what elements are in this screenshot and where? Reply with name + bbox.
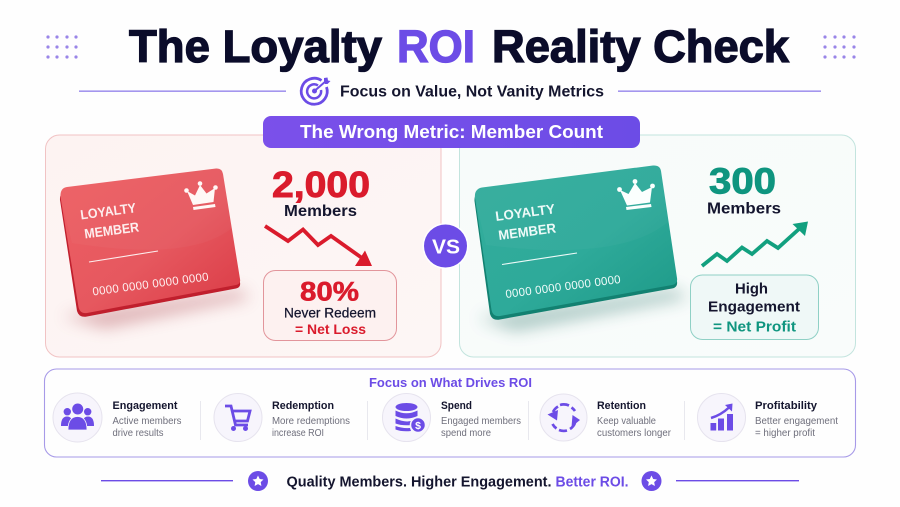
title: The Loyalty <box>129 21 382 72</box>
item: engagement: Active members <box>112 416 182 427</box>
icon: growth chart <box>710 404 733 430</box>
callout: high engagement: High <box>735 280 768 298</box>
callout: high engagement: Engagement <box>708 298 800 316</box>
title <box>129 21 790 72</box>
callout: 80% never redeem <box>264 270 396 340</box>
item: retention: Retention <box>597 400 646 412</box>
subtitle rule left <box>79 90 286 92</box>
item: retention <box>540 394 672 441</box>
item: redemption: More redemptions <box>272 416 350 427</box>
card text <box>79 200 209 298</box>
item: engagement <box>53 393 182 442</box>
card text: 0000 0000 0000 0000 <box>92 271 209 298</box>
arrow: declining <box>265 226 372 266</box>
icon: crown <box>617 179 655 210</box>
item: retention: customers longer <box>597 428 672 439</box>
item: profitability <box>698 394 838 442</box>
item: profitability: Profitability <box>755 400 818 412</box>
callout: 80% never redeem: 80% <box>300 276 359 306</box>
icon: people <box>61 404 94 430</box>
card shadow <box>62 290 250 328</box>
panel: drivers of ROI <box>44 369 856 457</box>
icon: star badge right <box>642 471 662 491</box>
subtitle rule right <box>618 90 821 92</box>
panel: right metric (green) <box>460 135 856 357</box>
title: Reality Check <box>492 21 790 72</box>
callout: high engagement <box>690 275 818 340</box>
item: spend: Engaged members <box>441 416 521 427</box>
item: profitability: Better engagement <box>755 416 838 427</box>
footer rule right <box>676 480 799 481</box>
card shadow <box>478 289 688 331</box>
icon: target <box>301 78 330 104</box>
badge: VS <box>422 223 468 269</box>
icon: coins: $ <box>415 420 421 432</box>
stat: 300 members: Members <box>707 200 781 218</box>
icon: cycle arrows <box>548 404 580 431</box>
card text: LOYALTY <box>79 200 137 222</box>
icon: star badge left <box>248 471 268 491</box>
stat: 2,000 members: 2,000 <box>272 164 370 205</box>
footer tagline: Better ROI. <box>556 474 628 490</box>
item: redemption <box>214 394 350 442</box>
panel: wrong metric (red) <box>46 135 441 357</box>
card: red loyalty card <box>60 168 240 317</box>
stat: 300 members: 300 <box>709 160 776 202</box>
card text: MEMBER <box>83 219 140 241</box>
stat: 2,000 members: Members <box>284 203 357 220</box>
stat: 2,000 members <box>272 164 370 220</box>
subtitle: Focus on Value, Not Vanity Metrics <box>340 84 604 100</box>
heading: focus on what drives ROI: Focus on What Drives ROI <box>369 376 532 390</box>
item: spend: spend more <box>441 428 492 439</box>
card text: 0000 0000 0000 0000 <box>505 274 621 301</box>
item: engagement: drive results <box>112 428 164 439</box>
callout: 80% never redeem: Never Redeem <box>284 306 376 320</box>
footer tagline: Quality Members. Higher Engagement. <box>286 474 552 490</box>
card text: MEMBER <box>497 221 557 243</box>
decorative dot grid right <box>823 35 856 59</box>
callout: 80% never redeem: = Net Loss <box>295 321 366 337</box>
item: redemption: increase ROI <box>272 428 324 439</box>
decorative dot grid left <box>46 35 78 59</box>
title: ROI <box>397 21 475 72</box>
arrow: rising <box>702 222 808 266</box>
item: retention: Keep valuable <box>597 416 657 427</box>
icon: crown <box>184 181 218 210</box>
item: profitability: = higher profit <box>755 428 815 439</box>
icon: cart <box>225 406 250 431</box>
footer rule left <box>101 480 233 481</box>
callout: high engagement: = Net Profit <box>713 318 796 336</box>
item: redemption: Redemption <box>272 400 334 412</box>
card text <box>494 201 621 301</box>
card text: LOYALTY <box>494 201 556 224</box>
item: spend: Spend <box>441 400 472 412</box>
card: green loyalty card <box>474 165 677 320</box>
stat: 300 members <box>707 160 781 218</box>
heading pill: the wrong metric <box>263 116 640 148</box>
badge: VS: VS <box>432 236 460 258</box>
item: engagement: Engagement <box>112 400 178 412</box>
item: spend <box>382 394 521 442</box>
heading pill: the wrong metric: The Wrong Metric: Member Count <box>300 122 603 142</box>
